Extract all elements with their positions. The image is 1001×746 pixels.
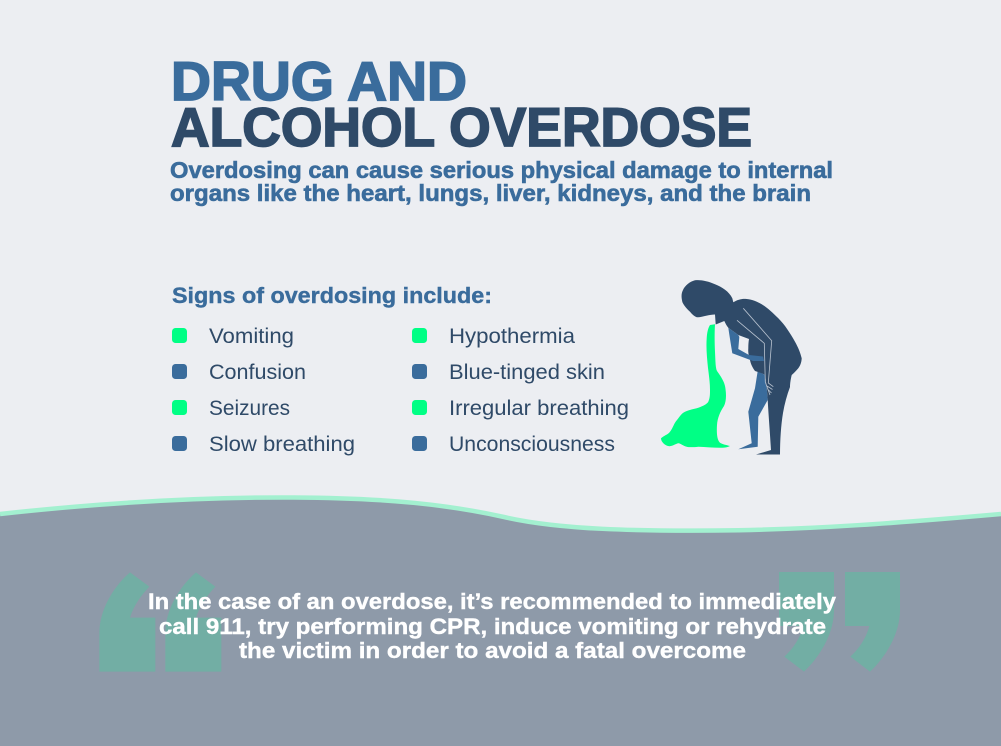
title: DRUG AND [171,51,467,112]
title: ALCOHOL OVERDOSE [171,97,752,158]
callout text [148,589,837,663]
signs list: right column [412,325,629,456]
wave footer band [0,497,1001,746]
subtitle: Overdosing can cause serious physical damage to internal [170,157,833,183]
callout text: In the case of an overdose, it’s recommended to immediately [148,589,837,614]
icon: person vomiting [661,280,802,454]
item: vomiting [172,325,294,348]
signs list: left column [172,325,355,456]
item: irregular breathing: Irregular breathing [449,397,629,420]
subtitle: organs like the heart, lungs, liver, kidneys, and the brain [170,180,811,206]
callout text: call 911, try performing CPR, induce vomiting or rehydrate [159,614,826,639]
item: seizures: Seizures [209,397,290,420]
item: unconsciousness: Unconsciousness [449,433,615,456]
item: slow breathing: Slow breathing [209,433,355,456]
item: seizures [172,397,290,420]
subtitle [170,157,833,206]
item: confusion: Confusion [209,361,306,384]
callout text: the victim in order to avoid a fatal overcome [239,638,746,663]
title [171,51,752,158]
list heading: Signs of overdosing include: [172,283,492,308]
icon: closing quote mark [779,572,900,672]
item: hypothermia: Hypothermia [449,325,575,348]
icon: opening quote mark [99,572,221,672]
item: vomiting: Vomiting [209,325,294,348]
item: blue-tinged skin: Blue-tinged skin [449,361,605,384]
